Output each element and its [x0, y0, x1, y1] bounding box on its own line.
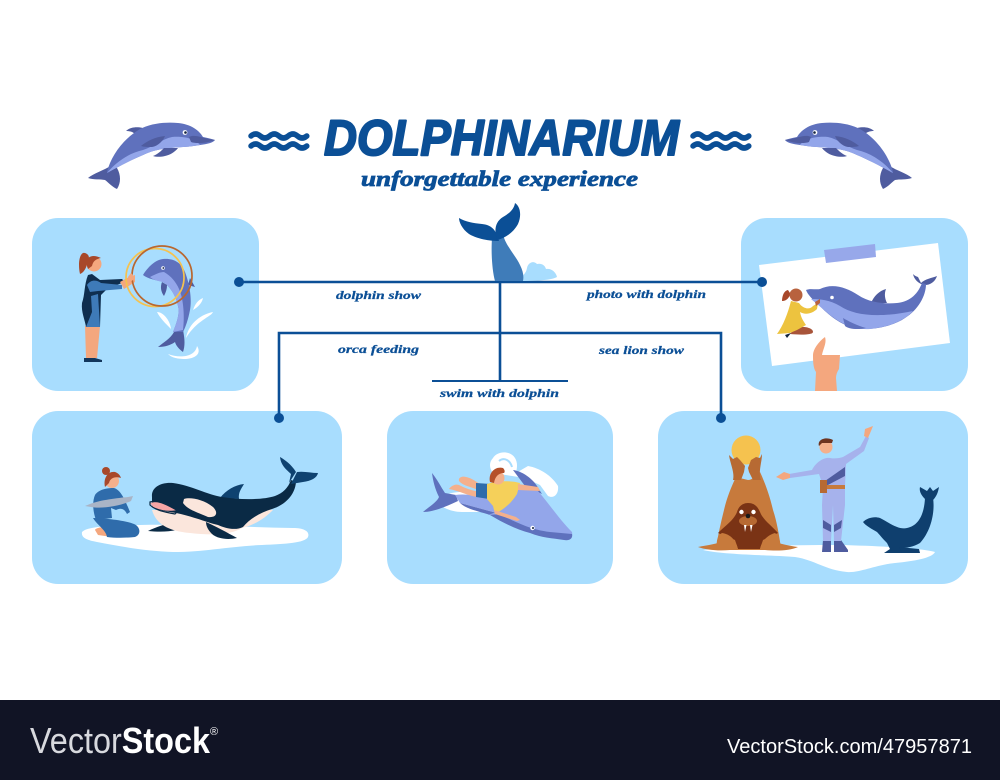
photo card	[759, 243, 950, 366]
label: dolphin show: dolphin show	[336, 290, 421, 302]
boy swimmer	[449, 468, 540, 521]
footer band	[0, 700, 1000, 780]
male trainer	[776, 426, 873, 552]
girl	[777, 288, 820, 338]
dolphin with boy	[423, 468, 572, 540]
panel: dolphin show	[32, 218, 259, 391]
label: swim with dolphin: swim with dolphin	[439, 388, 559, 400]
seated woman with fish	[85, 467, 139, 538]
dolphin in hoop	[143, 259, 195, 352]
icon: left waves	[251, 134, 307, 148]
sea lion	[863, 487, 939, 553]
orca	[148, 457, 318, 539]
walrus	[698, 454, 798, 551]
label: sea lion show: sea lion show	[598, 345, 684, 357]
footer url: VectorStock.com/47957871	[727, 736, 972, 758]
hand holding photo	[813, 337, 840, 391]
white ice floe	[82, 525, 308, 552]
footer logo: VectorStock	[30, 720, 211, 761]
panel: photo with dolphin	[741, 218, 968, 391]
connector dots	[234, 277, 767, 423]
icon: right leaping dolphin	[785, 123, 912, 189]
title: DOLPHINARIUM	[324, 110, 680, 166]
dolphin on photo	[806, 274, 937, 329]
tape	[824, 244, 876, 263]
subtitle: unforgettable experience	[361, 166, 638, 191]
panel: orca feeding	[32, 411, 342, 584]
connector lines	[239, 282, 762, 418]
white ice floe	[703, 545, 935, 572]
water wave behind	[437, 452, 558, 512]
label: photo with dolphin: photo with dolphin	[586, 289, 706, 301]
ball	[732, 436, 760, 464]
label: orca feeding: orca feeding	[338, 344, 419, 356]
panel: swim with dolphin	[387, 411, 613, 584]
water splashes	[157, 298, 213, 359]
hoops	[126, 246, 192, 306]
panel: sea lion show	[658, 411, 968, 584]
icon: left leaping dolphin	[88, 123, 215, 189]
footer registered mark: ®	[210, 726, 218, 738]
woman trainer	[79, 253, 135, 362]
icon: whale tail	[459, 203, 557, 281]
icon: right waves	[693, 134, 749, 148]
